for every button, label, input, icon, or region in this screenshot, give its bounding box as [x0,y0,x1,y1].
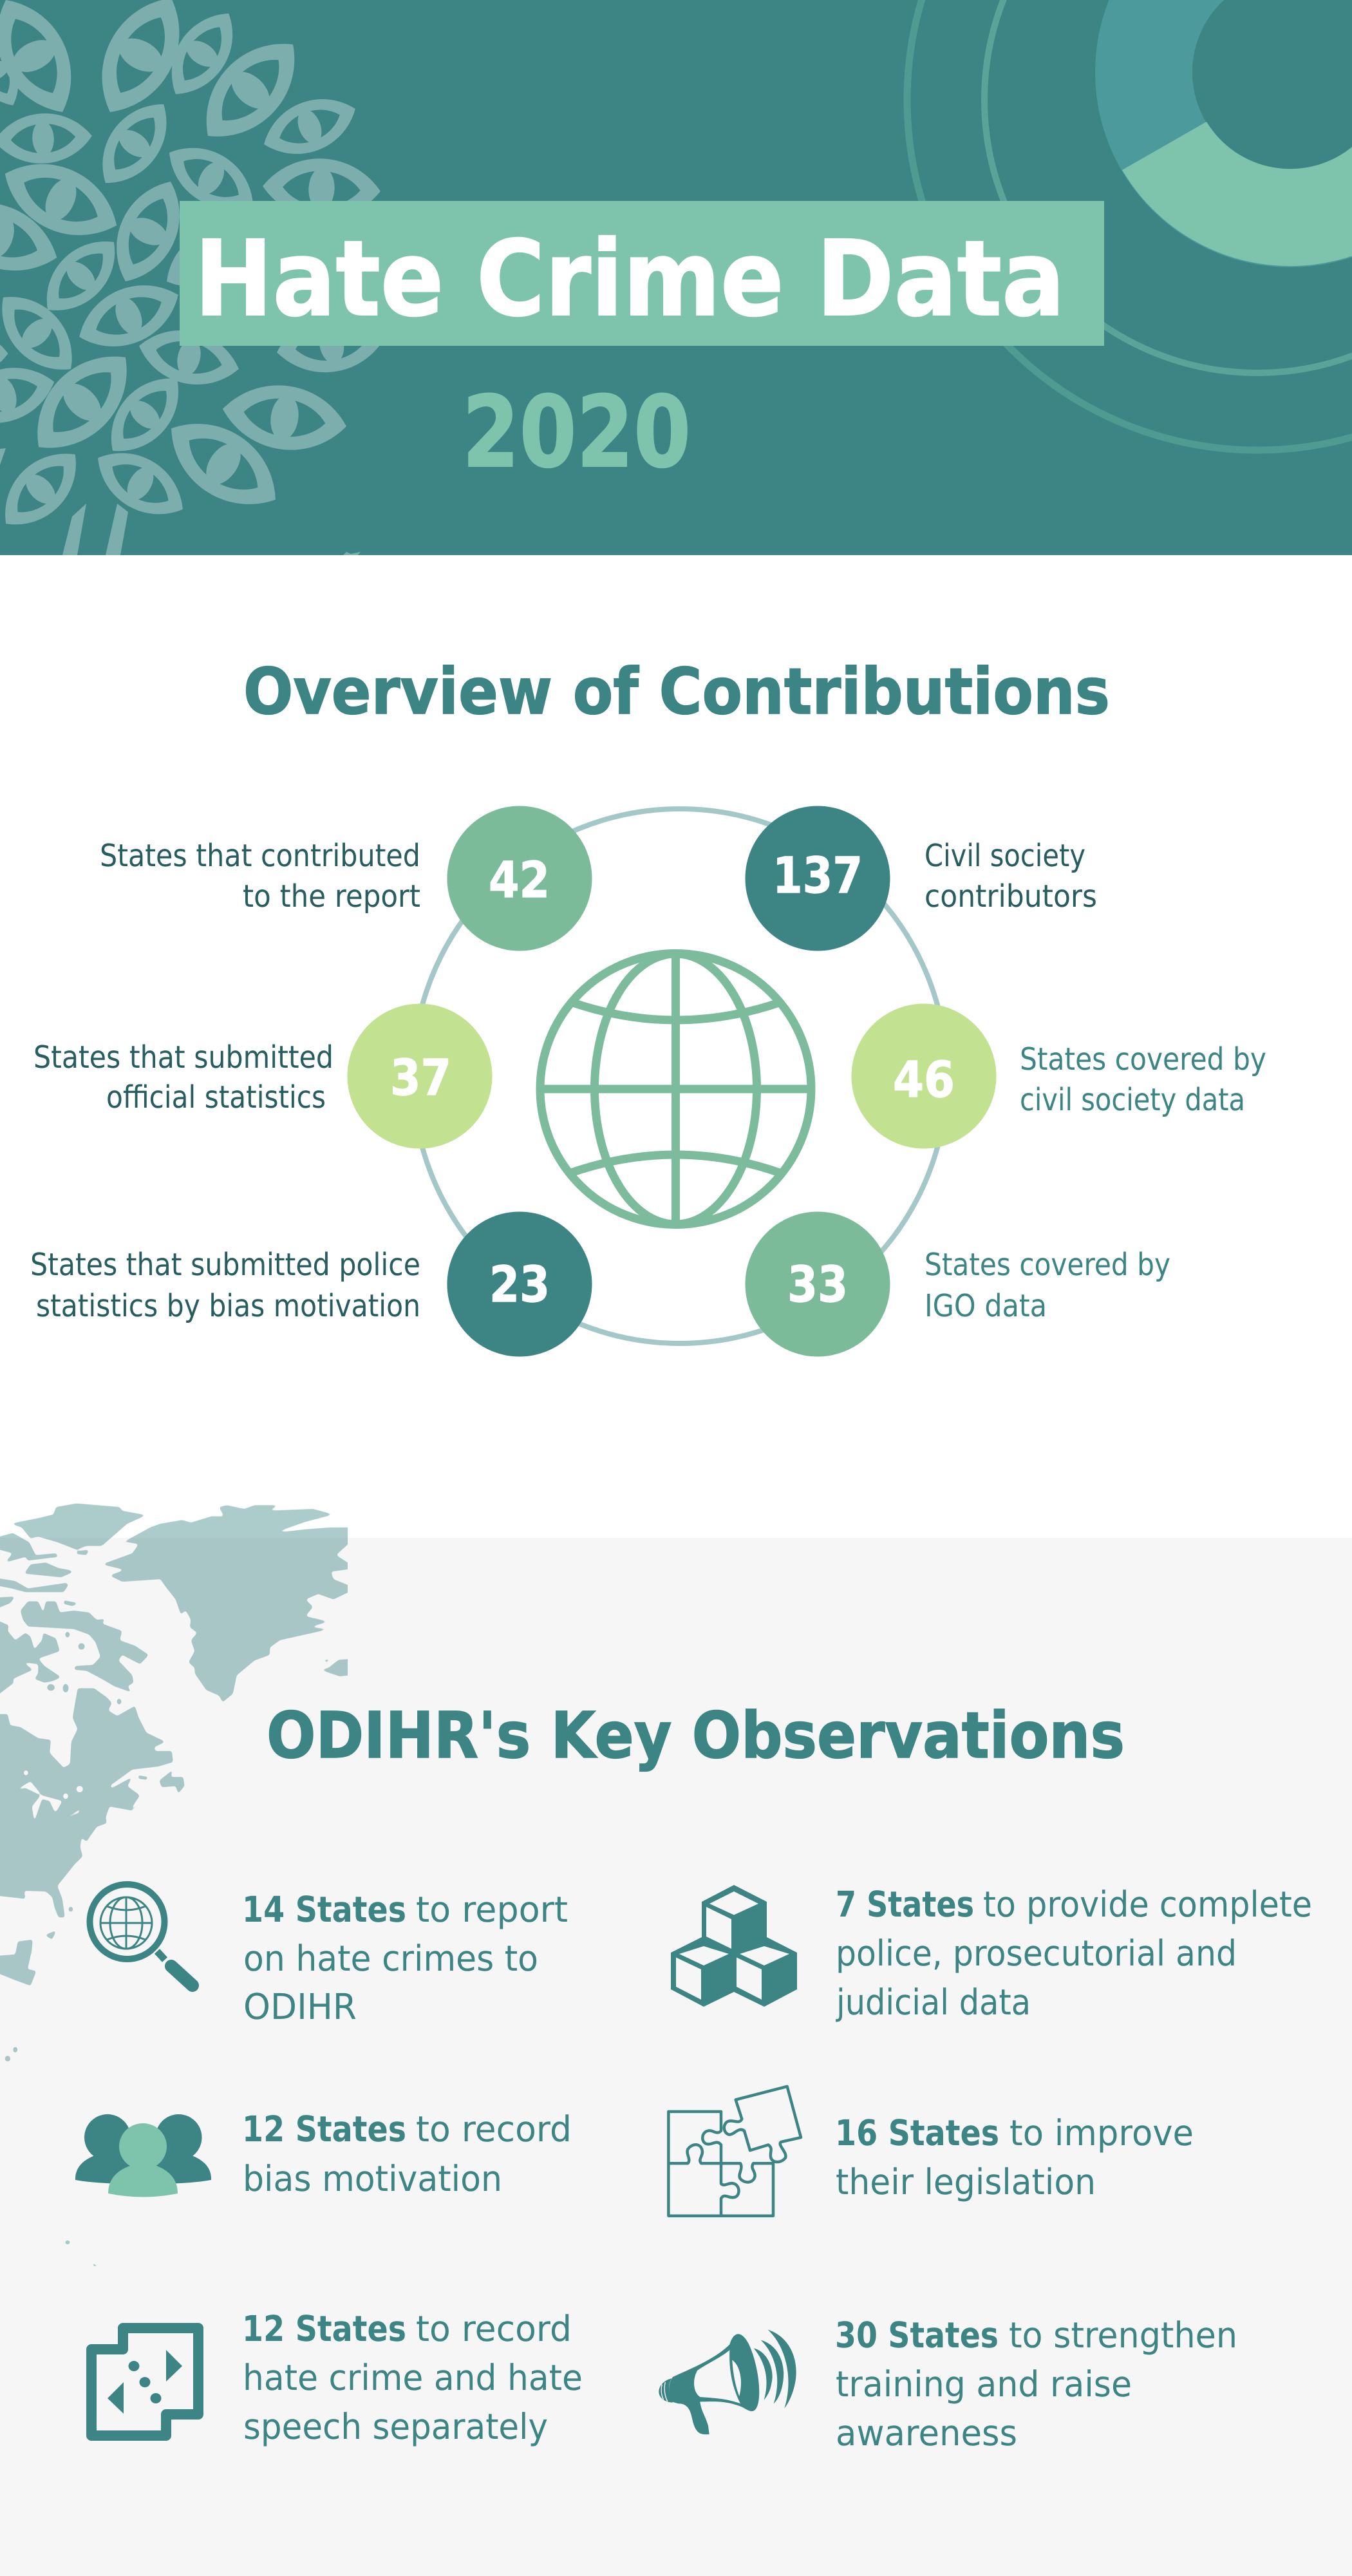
panel: key observations background [0,1538,1352,2576]
icon: stacked cubes [671,1885,797,2007]
text: hate crime and hate [243,2357,583,2398]
stat: 42: 42 [489,852,550,909]
label: states that contributed: to the report [243,878,420,914]
observation: 30 states [659,2315,1237,2454]
observation: 7 states [671,1884,1312,2023]
year: 2020 [462,375,691,490]
heading: ODIHR's key observations: ODIHR's Key Observations [267,1699,1125,1773]
stat: 37: 37 [390,1050,451,1107]
text: police, prosecutorial and [836,1933,1237,1974]
stat: 23 [447,1212,592,1356]
text: 12 States [242,2108,406,2150]
label: states that submitted police statistics: States that submitted police [30,1247,420,1283]
text [242,2308,583,2447]
text: to record [416,2108,572,2150]
heading: overview of contributions: Overview of Contributions [243,655,1110,729]
icon: magnifier over globe [90,1884,192,1985]
observation: 12 states bias motivation [75,2108,572,2199]
decorative concentric rings [907,0,1352,450]
donut chart decoration [1122,0,1352,266]
text: to improve [1009,2112,1194,2154]
title box [180,201,1104,346]
label: states that submitted police statistics: statistics by bias motivation [36,1288,420,1324]
panel: contributions diagram [30,806,1266,1356]
icon: separated puzzle frame [91,2328,198,2436]
text: their legislation [836,2161,1096,2202]
map specks [66,2240,97,2266]
text: 16 States [835,2112,999,2154]
label: states covered by civil society data: States covered by [1020,1041,1266,1077]
label: states covered by IGO data: States covered by [925,1247,1170,1283]
title: Hate Crime Data [194,219,1065,340]
stat: 33 [746,1212,890,1356]
stat: 137: 137 [773,848,863,905]
text: to strengthen [1009,2315,1237,2356]
label: states that submitted official statistics: States that submitted [33,1039,333,1075]
icon: jigsaw puzzle [668,2087,801,2216]
label: states that submitted official statistics: official statistics [106,1079,326,1115]
icon: globe [540,953,811,1225]
stat: 37 [348,1003,492,1149]
label: states that submitted official statistics [33,1039,333,1115]
header banner [0,0,1352,555]
text: ODIHR [243,1986,357,2027]
text: on hate crimes to [243,1938,538,1979]
text: to provide complete [983,1884,1312,1925]
text: training and raise [836,2363,1132,2405]
world map fragment [0,1503,357,2061]
text: to record [416,2308,572,2349]
label: civil society contributors: contributors [925,878,1097,914]
label: states covered by IGO data [925,1247,1170,1324]
text: 7 States [836,1884,974,1925]
stat: 42 [447,806,592,951]
text: 12 States [242,2308,406,2349]
label: civil society contributors: Civil society [925,838,1085,874]
text: 30 States [835,2315,999,2356]
stat: 23: 23 [489,1256,550,1314]
label: states that submitted police statistics [30,1247,420,1324]
text: speech separately [243,2406,548,2447]
icon: group of people [75,2114,211,2197]
label: states that contributed [100,838,420,914]
stat: 137 [746,806,890,951]
observation: 12 states hate speech [91,2308,583,2447]
observation: 14 states [90,1884,568,2027]
text: 14 States [242,1889,406,1930]
text: bias motivation [243,2158,502,2199]
text [242,2108,572,2199]
label: states covered by civil society data: civil society data [1020,1082,1245,1118]
label: states covered by civil society data [1020,1041,1266,1118]
text [835,2112,1194,2202]
tree of eyes illustration [0,0,391,555]
stat: 46: 46 [893,1052,955,1109]
text: awareness [836,2412,1017,2454]
text [836,1884,1312,2023]
text [242,1889,568,2027]
label: states that contributed: States that contributed [100,838,420,874]
label: states covered by IGO data: IGO data [925,1288,1047,1324]
label: civil society contributors [925,838,1097,914]
text [835,2315,1237,2454]
stat: 33: 33 [787,1256,848,1314]
stat: 46 [851,1003,997,1149]
observation: 16 states [668,2087,1194,2216]
icon: megaphone [659,2330,796,2434]
text: judicial data [836,1982,1031,2023]
text: to report [416,1889,568,1930]
